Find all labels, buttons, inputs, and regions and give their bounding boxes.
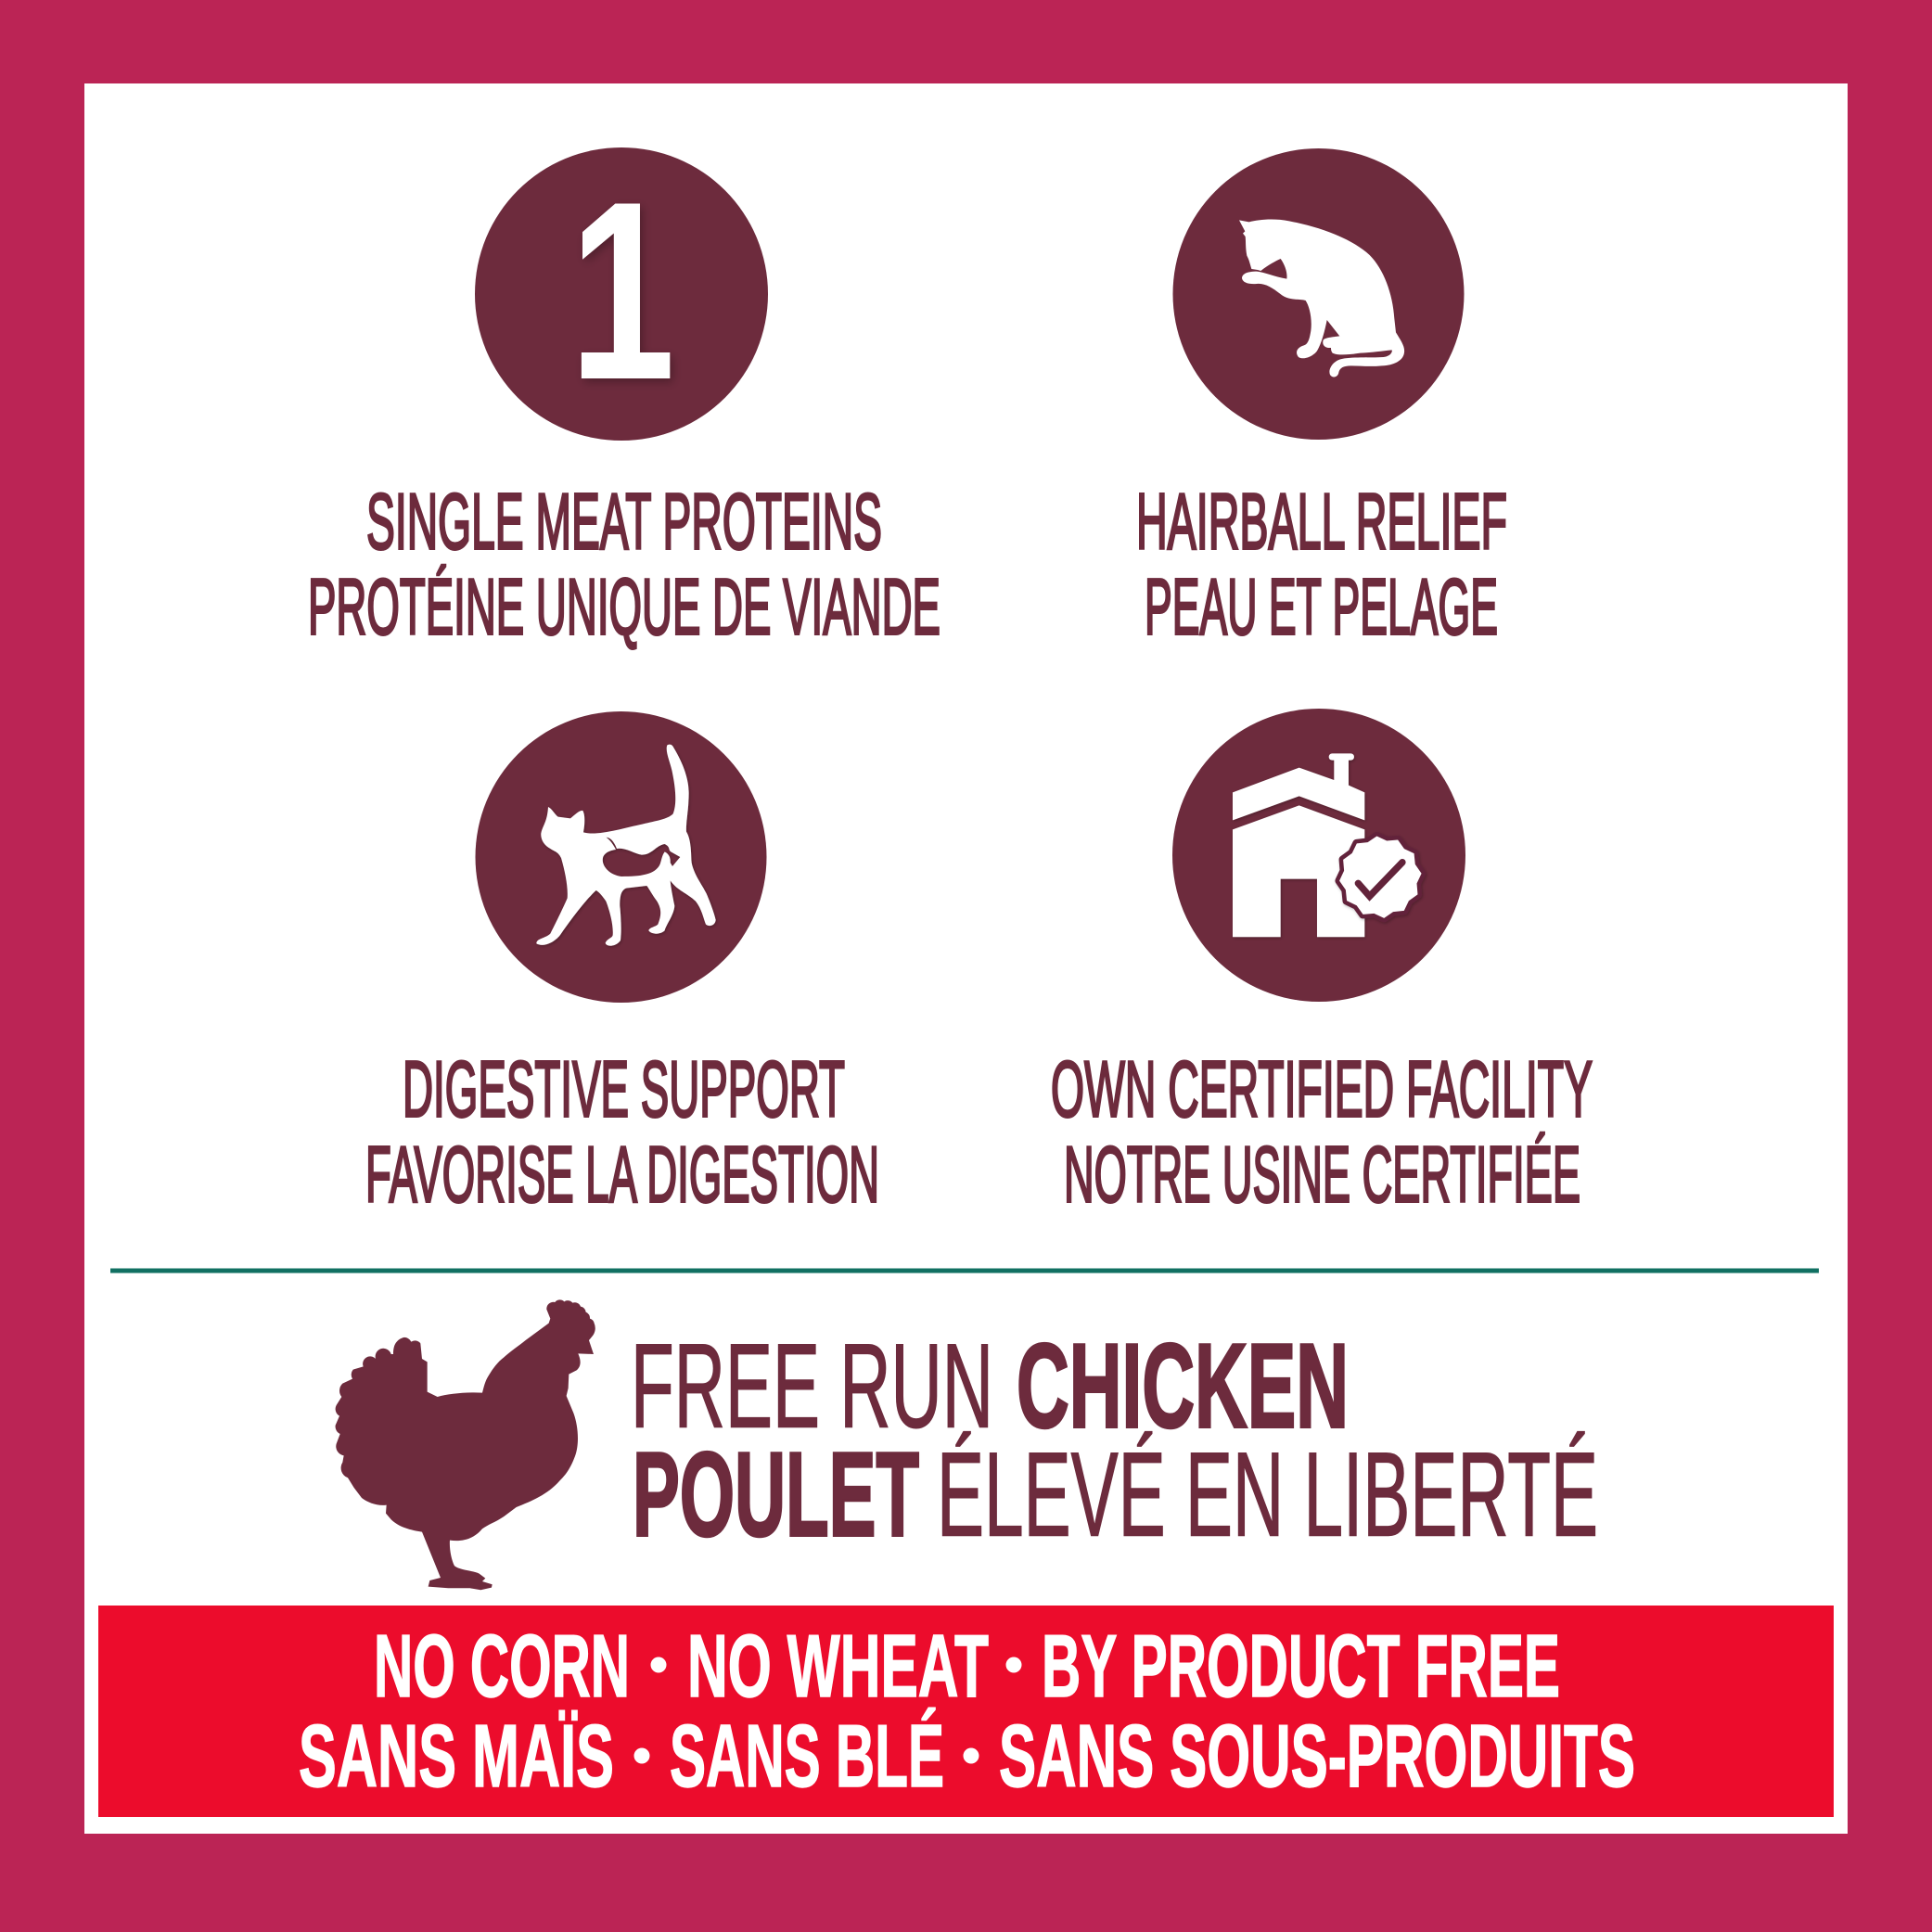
banner: no corn, no wheat, by-product free	[98, 1606, 1834, 1817]
icon: numeral one: 1	[569, 149, 675, 433]
caption: digestive support: FAVORISE LA DIGESTION	[365, 1132, 879, 1219]
banner line: French: SANS BLÉ	[670, 1707, 944, 1806]
caption: digestive support	[365, 1046, 879, 1219]
caption: hairball relief: HAIRBALL RELIEF	[1136, 479, 1507, 566]
caption: digestive support: DIGESTIVE SUPPORT	[403, 1046, 845, 1133]
headline: free run chicken	[631, 1319, 1598, 1562]
banner line: English: BY PRODUCT FREE	[1042, 1617, 1560, 1716]
panel: digestive support	[365, 711, 879, 1219]
headline: free run chicken: FREE RUN	[631, 1319, 993, 1452]
divider line	[110, 1269, 1819, 1273]
icon: cat with digestive tract	[536, 745, 716, 946]
headline: free run chicken: CHICKEN	[1017, 1319, 1349, 1452]
banner line: French	[299, 1707, 1635, 1806]
caption: single meat proteins: SINGLE MEAT PROTEINS	[366, 479, 882, 566]
banner line: French: SANS MAÏS	[299, 1707, 614, 1806]
panel: own certified facility	[1051, 709, 1593, 1219]
icon: cat grooming	[1239, 219, 1404, 377]
banner line: English	[374, 1617, 1560, 1716]
caption: hairball relief: PEAU ET PELAGE	[1145, 564, 1498, 651]
panel: single meat proteins	[308, 147, 940, 651]
caption: single meat proteins	[308, 479, 940, 651]
panel: hairball relief	[1136, 148, 1507, 651]
caption: own certified facility	[1051, 1046, 1593, 1219]
banner line: English: NO CORN	[374, 1617, 630, 1716]
caption: single meat proteins: PROTÉINE UNIQUE DE VIANDE	[308, 564, 940, 651]
caption: hairball relief	[1136, 479, 1507, 651]
banner line: English: NO WHEAT	[687, 1617, 989, 1716]
headline: free run chicken: POULET	[633, 1428, 919, 1562]
icon: chicken silhouette	[336, 1299, 595, 1590]
icon: house with check badge	[1233, 753, 1422, 937]
